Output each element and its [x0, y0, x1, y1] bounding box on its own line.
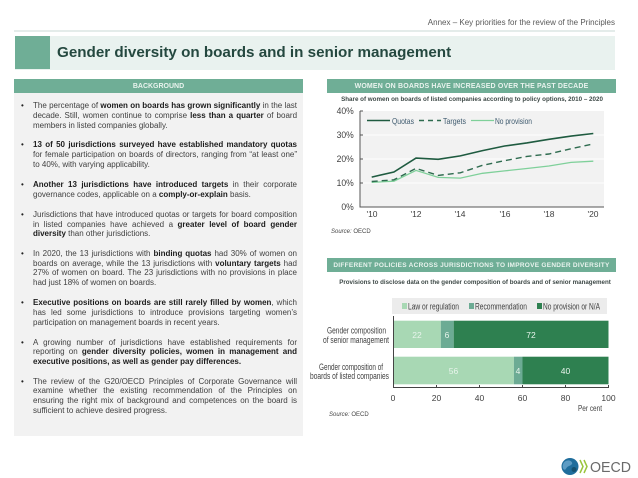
bar: senior management: [394, 321, 608, 348]
y axis labels: 10%: [337, 178, 354, 188]
bar: listed companies: 56: [449, 366, 458, 376]
bar: senior management: 6: [445, 330, 450, 340]
bar: listed companies: [394, 357, 608, 384]
text block: background bullets: Jurisdictions that have introduced quotas or targets for board composition: [33, 210, 297, 219]
text block: background bullets: •: [21, 338, 24, 347]
y axis labels: [337, 106, 354, 212]
title band: [15, 36, 615, 70]
text block: background bullets: •: [21, 210, 24, 219]
text block: background bullets: Executive positions on boards are still rarely filled by women, which: [33, 298, 297, 307]
text block: background bullets: 27% of women on board. The 23 jurisdictions with no provisions in place: [33, 268, 297, 277]
text block: background bullets: diversity than other jurisdictions.: [33, 229, 150, 238]
text block: background bullets: in listed companies have achieved a greater level of board gender: [33, 220, 297, 229]
axis labels: [391, 393, 616, 403]
text block: background bullets: 13 of 50 jurisdictions surveyed have established mandatory quotas: [33, 140, 297, 149]
text block: background bullets: decade. Still, women continue to comprise less than a quarter of board: [33, 111, 297, 120]
axis labels: 20: [432, 393, 441, 403]
y axis labels: 30%: [337, 130, 354, 140]
chart subtitle: bar chart: Provisions to disclose data on the gender composition of boards and of senior management: [339, 279, 611, 286]
x axis labels: '16: [499, 209, 511, 219]
heading: women on boards: WOMEN ON BOARDS HAVE INCREASED OVER THE PAST DECADE: [355, 83, 588, 90]
x axis labels: '20: [587, 209, 599, 219]
axis labels: 0: [391, 393, 396, 403]
axis labels: 60: [518, 393, 527, 403]
legend: No provision or N/A: [543, 302, 600, 312]
stacked bar chart: Per cent: [578, 403, 602, 413]
axis labels: 100: [601, 393, 616, 403]
x axis labels: [366, 209, 599, 219]
text block: background bullets: participation on management boards in recent years.: [33, 318, 220, 327]
category labels: of senior management: [323, 335, 389, 345]
text block: background bullets: •: [21, 377, 24, 386]
bar: listed companies: 4: [516, 366, 521, 376]
legend: [367, 116, 532, 126]
text block: background bullets: members in listed companies globally.: [33, 121, 168, 130]
y axis labels: 40%: [337, 106, 354, 116]
text block: background bullets: •: [21, 298, 24, 307]
icon: OECD logo: [562, 458, 631, 476]
text block: background bullets: •: [21, 140, 24, 149]
axis labels: 80: [561, 393, 570, 403]
category labels: boards of listed companies: [310, 371, 389, 381]
text block: background bullets: has led some jurisdictions to introduce provisions targeting women’s: [33, 308, 297, 317]
text block: background bullets: executive positions, as well as gender pay differences.: [33, 357, 241, 366]
heading: women on boards: [327, 79, 616, 93]
legend: Law or regulation: [408, 302, 459, 312]
x axis labels: '18: [543, 209, 555, 219]
text block: background bullets: [21, 101, 297, 415]
icon: OECD logo: OECD: [590, 459, 631, 476]
y axis labels: 20%: [337, 154, 354, 164]
text block: background bullets: to 40%, with varying applicability.: [33, 160, 150, 169]
legend: Recommendation: [475, 302, 527, 312]
legend: Targets: [443, 116, 466, 126]
text block: background bullets: for female participation on boards of directors, ranging from “at least one”: [33, 150, 297, 159]
text block: background bullets: •: [21, 180, 24, 189]
series: targets: [372, 144, 593, 182]
heading: background: BACKGROUND: [133, 83, 184, 90]
text block: background bullets: boards on average, while the 13 jurisdictions with voluntary targets had: [33, 259, 297, 268]
x axis labels: '12: [410, 209, 422, 219]
source: line chart: Source: OECD: [331, 229, 371, 235]
bar: senior management: 22: [412, 330, 422, 340]
text block: background bullets: governance codes, applicable on a comply-or-explain basis.: [33, 190, 251, 199]
text block: background bullets: had just 18% of women on boards.: [33, 278, 156, 287]
text block: background bullets: •: [21, 101, 24, 110]
legend: [392, 298, 607, 314]
stacked bar chart: [310, 298, 616, 413]
text block: background bullets: The review of the G20/OECD Principles of Corporate Governance will: [33, 377, 297, 386]
text block: background bullets: Another 13 jurisdictions have introduced targets in their corporate: [33, 180, 297, 189]
category labels: [310, 326, 389, 381]
annex header text: Annex – Key priorities for the review of the Principles: [428, 18, 615, 27]
text block: background bullets: sufficient to achieve desired progress.: [33, 406, 167, 415]
heading: background: [14, 79, 303, 93]
text block: background bullets: The percentage of women on boards has grown significantly in the last: [33, 101, 297, 110]
category labels: Gender composition of: [319, 362, 383, 372]
x axis labels: '10: [366, 209, 378, 219]
text block: background bullets: •: [21, 249, 24, 258]
bar: listed companies: 40: [561, 366, 570, 376]
title: Gender diversity on boards and in senior management: [57, 44, 451, 61]
category labels: Gender composition: [327, 326, 386, 336]
axis labels: 40: [475, 393, 484, 403]
legend: No provision: [495, 116, 532, 126]
text block: background bullets: A growing number of jurisdictions have established requirements for: [33, 338, 297, 347]
title accent square: [15, 36, 50, 69]
y axis labels: 0%: [341, 202, 354, 212]
text block: background bullets: In 2020, the 13 jurisdictions with binding quotas had 30% of women on: [33, 249, 297, 258]
bar: senior management: 72: [526, 330, 536, 340]
series: no provision: [372, 161, 593, 182]
text block: background bullets: examine whether the existing recommendation of the Principles on: [33, 386, 297, 395]
panel: background: [14, 79, 303, 436]
heading: different policies: [327, 258, 616, 272]
series: quotas: [372, 134, 593, 177]
x axis labels: '14: [454, 209, 466, 219]
text block: background bullets: ensuring the right mix of background and competences on the board is: [33, 396, 297, 405]
source: bar chart: Source: OECD: [329, 412, 369, 418]
axes: [394, 316, 608, 388]
legend: Quotas: [392, 116, 414, 126]
line chart: [336, 106, 604, 219]
heading: different policies: DIFFERENT POLICIES ACROSS JURISDICTIONS TO IMPROVE GENDER DIVERSITY: [333, 262, 610, 269]
chart subtitle: line chart: Share of women on boards of listed companies according to policy options, 2010 – 2020: [341, 96, 603, 103]
text block: background bullets: reporting on gender diversity policies, women in management and: [33, 347, 297, 356]
